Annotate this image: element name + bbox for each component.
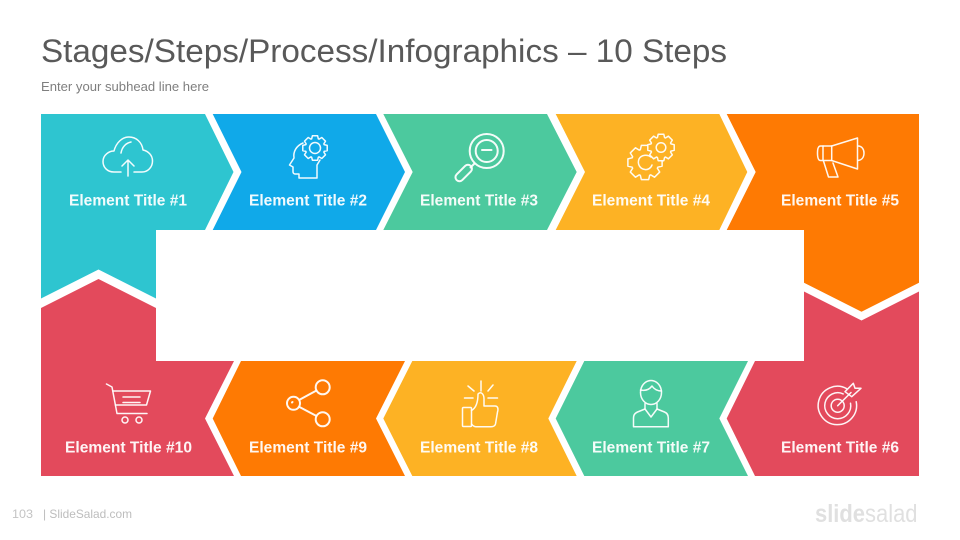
step 9 label: Element Title #9 xyxy=(249,440,367,456)
icon: magnifier xyxy=(454,134,504,183)
panel: step 8 xyxy=(383,361,577,476)
icon: share xyxy=(287,380,330,426)
step 10 arrow shape xyxy=(41,279,234,476)
step 4 arrow shape xyxy=(556,114,747,230)
subhead: Enter your subhead line here xyxy=(41,79,209,94)
icon: gears xyxy=(628,134,674,180)
panel: step 4 xyxy=(556,114,747,230)
step 10 label: Element Title #10 xyxy=(65,440,192,456)
footer site name: | SlideSalad.com xyxy=(43,507,132,521)
step 3 label: Element Title #3 xyxy=(420,192,538,210)
step 1 label: Element Title #1 xyxy=(69,192,187,210)
step 8 label: Element Title #8 xyxy=(420,440,538,456)
icon: thumbs up xyxy=(462,381,498,427)
step 5 label: Element Title #5 xyxy=(781,192,899,210)
panel: step 2 xyxy=(213,114,405,230)
page number: 103 xyxy=(12,507,33,521)
icon: person xyxy=(634,380,668,427)
icon: cloud upload xyxy=(103,137,152,176)
panel: step 1 xyxy=(41,114,234,298)
logo: slidesalad: slidesalad xyxy=(815,500,918,528)
icon: target with arrow xyxy=(818,383,861,425)
step 5 arrow shape xyxy=(727,114,919,312)
panel: step 10 xyxy=(41,279,234,476)
icon: megaphone xyxy=(818,138,864,177)
step 4 label: Element Title #4 xyxy=(592,192,710,210)
step 6 arrow shape xyxy=(727,292,919,476)
step 2 arrow shape xyxy=(213,114,405,230)
icon: shopping cart xyxy=(106,384,150,423)
panel: step 9 xyxy=(213,361,405,476)
panel: step 7 xyxy=(556,361,748,476)
step 9 arrow shape xyxy=(213,361,405,476)
step 8 arrow shape xyxy=(383,361,577,476)
panel: step 6 xyxy=(727,292,919,476)
title: Stages/Steps/Process/Infographics – 10 Steps xyxy=(41,33,727,69)
icon: head with gear xyxy=(290,136,327,178)
step 1 arrow shape xyxy=(41,114,234,298)
step 3 arrow shape xyxy=(383,114,577,230)
panel: step 5 xyxy=(727,114,919,312)
step 6 label: Element Title #6 xyxy=(781,440,899,456)
panel: step 3 xyxy=(383,114,577,230)
step 7 label: Element Title #7 xyxy=(592,440,710,456)
step 2 label: Element Title #2 xyxy=(249,192,367,210)
step 7 arrow shape xyxy=(556,361,748,476)
